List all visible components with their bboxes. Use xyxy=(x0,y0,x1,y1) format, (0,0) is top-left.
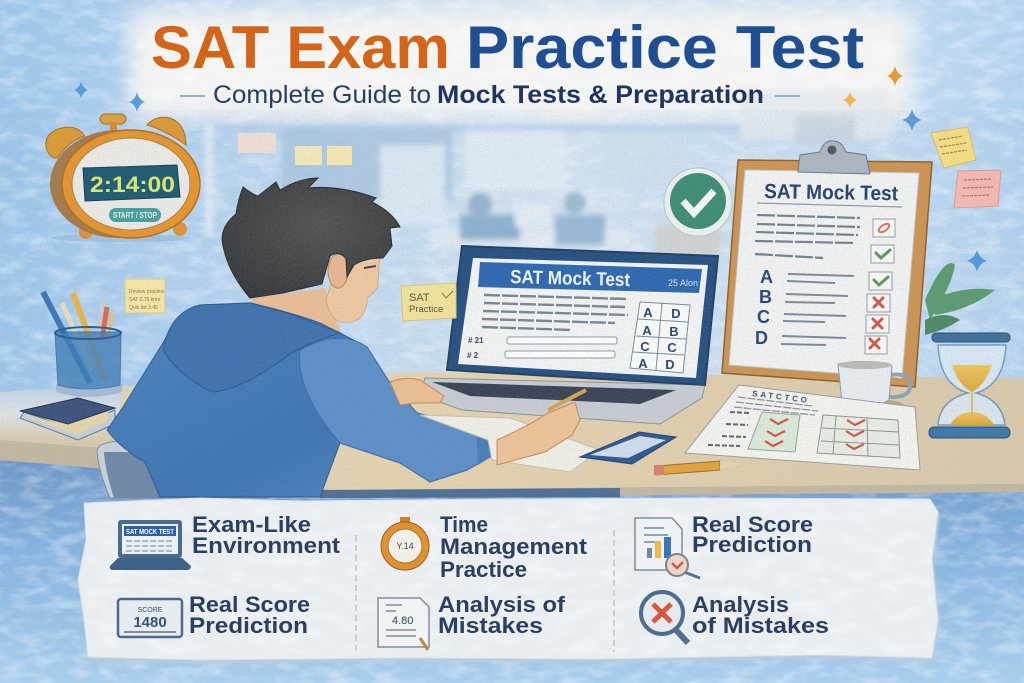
feature: real score prediction top: Real Score xyxy=(692,512,813,537)
feature panel xyxy=(78,498,940,663)
icon: magnifier with cross xyxy=(641,592,688,643)
feature: real score prediction top xyxy=(635,512,813,578)
subtitle xyxy=(180,81,800,109)
score sheet xyxy=(685,385,920,470)
title: Practice Test xyxy=(466,14,864,81)
feature: exam-like environment: Exam-Like xyxy=(192,512,311,537)
answer grid: A xyxy=(643,305,653,320)
icon: alarm clock xyxy=(46,114,200,242)
background sticky notes xyxy=(238,133,352,165)
plant xyxy=(925,263,995,335)
neck and face xyxy=(250,254,380,335)
answer letters xyxy=(755,267,773,348)
answer letters: A xyxy=(760,267,773,287)
hourglass xyxy=(929,333,1010,438)
chair xyxy=(97,441,268,498)
feature: real score prediction bottom xyxy=(118,592,310,638)
sticky note: SAT Practice xyxy=(401,283,456,321)
subtitle: Complete Guide to xyxy=(213,81,431,109)
sticky note: left wall: Quiz list 3.45 xyxy=(129,305,158,311)
hand holding pencil xyxy=(497,390,586,465)
coffee mug xyxy=(836,361,910,411)
feature: analysis of mistakes right xyxy=(641,592,829,643)
clipboard paper xyxy=(729,170,919,378)
title: SAT Exam xyxy=(151,14,450,81)
screen header: 25 Alon xyxy=(668,278,698,288)
feature: time management practice: Management xyxy=(440,534,588,559)
icon: score board xyxy=(118,599,182,637)
question text lines xyxy=(755,215,860,258)
hair xyxy=(222,178,400,298)
answer rows: # 21 xyxy=(468,336,484,345)
answer rows: # 2 xyxy=(467,351,479,360)
screen frame xyxy=(447,246,718,385)
desk xyxy=(0,372,1024,498)
screen xyxy=(458,258,708,378)
sticky note: SAT Practice: Practice xyxy=(409,304,443,315)
answer grid: A xyxy=(638,356,648,371)
icon: score board: 1480 xyxy=(133,614,167,631)
screen header xyxy=(478,262,702,293)
feature: real score prediction bottom: Prediction xyxy=(189,613,308,638)
score sheet: SATCTCO xyxy=(752,389,807,405)
clock bells xyxy=(46,114,187,239)
icon: stopwatch xyxy=(381,517,429,570)
icon: green check badge xyxy=(664,168,732,236)
icon: laptop xyxy=(110,520,191,570)
laptop xyxy=(420,246,718,424)
answer grid: C xyxy=(640,339,650,354)
icon: document with pen: 4.80 xyxy=(392,615,413,627)
answer rows xyxy=(467,336,617,360)
sticky notes: right wall xyxy=(931,127,1001,208)
sparkle stars xyxy=(74,66,987,272)
sticky note: left wall xyxy=(125,279,165,313)
answer grid: B xyxy=(669,324,679,339)
icon: score board: SCORE xyxy=(138,607,163,614)
subtitle: Mock Tests & Preparation xyxy=(437,81,764,109)
answer letters: D xyxy=(755,328,768,348)
loose papers under hand xyxy=(420,415,600,472)
icon: stopwatch: Y.14 xyxy=(396,541,414,551)
feature: real score prediction bottom: Real Score xyxy=(189,592,310,617)
marks xyxy=(870,222,891,348)
answer lines xyxy=(781,274,854,345)
hand on laptop xyxy=(390,378,444,405)
feature: analysis of mistakes centre: Mistakes xyxy=(438,613,543,638)
keyboard deck xyxy=(420,378,705,424)
digital display xyxy=(83,165,180,201)
results grid xyxy=(748,412,900,458)
clipboard heading: SAT Mock Test xyxy=(764,180,898,205)
phone xyxy=(580,432,676,464)
sticky note: left wall: SAT 2.75 time xyxy=(129,297,160,303)
feature: exam-like environment xyxy=(110,512,341,570)
answer grid: C xyxy=(667,340,677,355)
answer grid xyxy=(630,302,690,373)
digital display: 2:14:00 xyxy=(90,172,175,197)
icon: laptop: SAT MOCK TEST xyxy=(126,529,175,536)
grain texture xyxy=(0,110,1024,495)
pen cup xyxy=(43,292,122,397)
answer letters: C xyxy=(757,307,770,327)
sand xyxy=(952,365,992,392)
start/stop button: START / STOP xyxy=(113,211,158,220)
icon: report with magnifier xyxy=(635,518,700,578)
feature: analysis of mistakes centre xyxy=(378,592,566,650)
feature: real score prediction top: Prediction xyxy=(692,532,812,557)
answer grid: D xyxy=(665,357,675,372)
student xyxy=(107,178,497,497)
notebooks xyxy=(20,398,115,440)
answer letters: B xyxy=(759,287,772,307)
sticky note: left wall: Review practice xyxy=(129,289,165,295)
feature: exam-like environment: Environment xyxy=(192,533,341,558)
answer grid: A xyxy=(642,323,652,338)
metal clip xyxy=(798,141,870,174)
pencil on desk xyxy=(654,461,740,475)
feature: time management practice: Time xyxy=(440,512,488,537)
answer grid: D xyxy=(671,306,681,321)
clipboard xyxy=(722,141,932,387)
check and cross boxes xyxy=(865,219,895,354)
icon: document with pen xyxy=(378,598,429,650)
screen header: SAT Mock Test xyxy=(510,267,631,291)
feature: analysis of mistakes right: of Mistakes xyxy=(692,613,829,638)
feature: time management practice xyxy=(381,512,588,582)
sticky note: SAT Practice: SAT xyxy=(409,292,430,304)
title xyxy=(151,14,864,81)
hoodie xyxy=(107,303,497,497)
question text lines xyxy=(482,295,628,330)
feature: time management practice: Practice xyxy=(440,557,527,582)
blurred classroom background xyxy=(200,90,890,255)
feature: analysis of mistakes right: Analysis xyxy=(692,592,789,617)
feature: analysis of mistakes centre: Analysis of xyxy=(438,592,566,617)
keyboard xyxy=(432,382,676,404)
start/stop button xyxy=(109,208,161,222)
